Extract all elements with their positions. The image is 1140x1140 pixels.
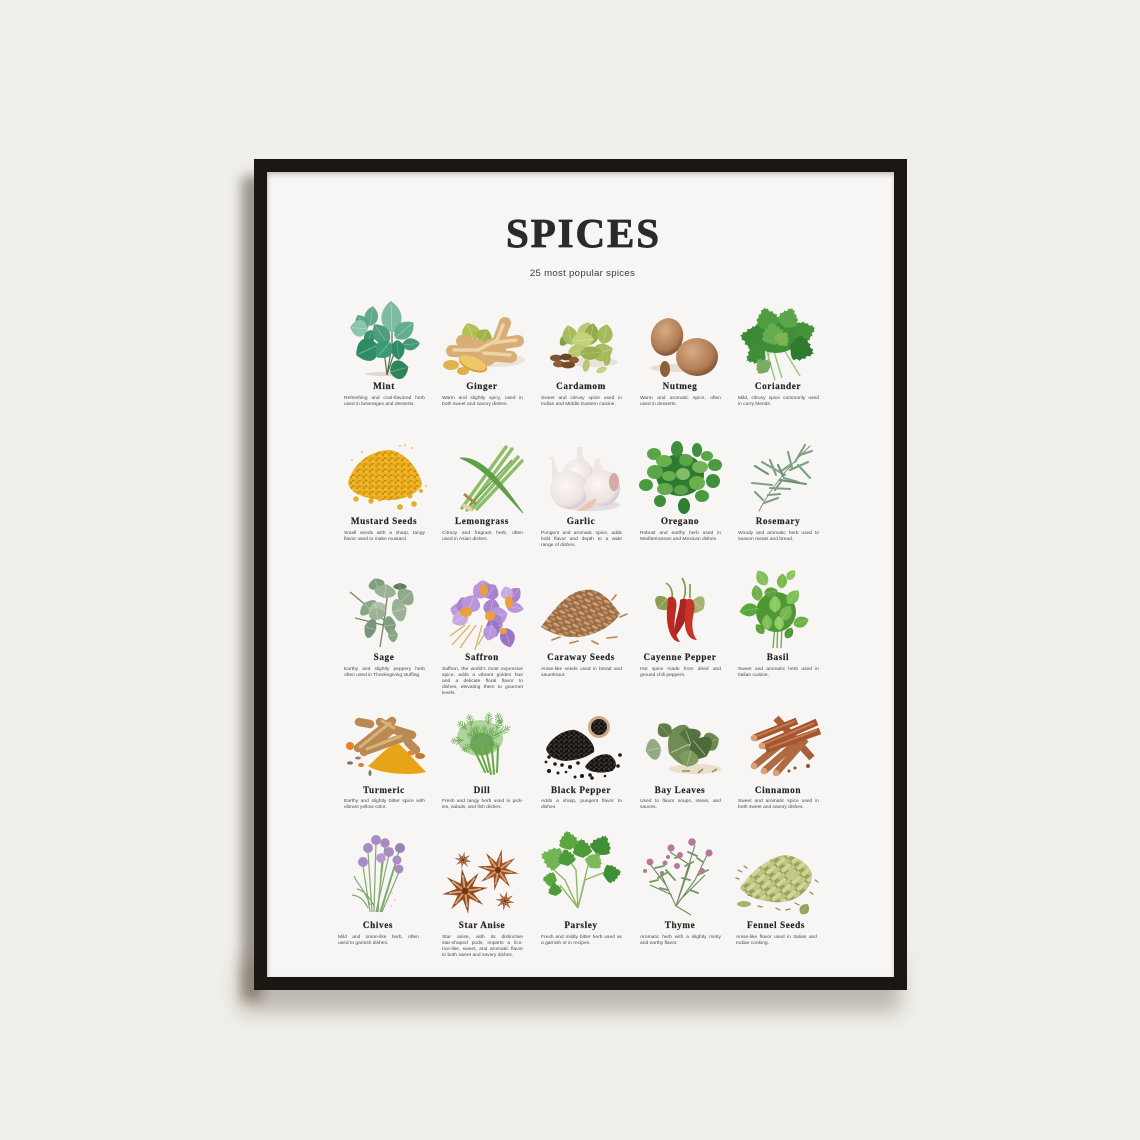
icon: oregano	[639, 441, 722, 514]
icon: star anise	[432, 826, 532, 914]
description: Robust and earthy herb used in	[640, 531, 721, 536]
description	[442, 666, 523, 696]
description: spice, adds a vibrant golden hue	[442, 673, 523, 678]
description: used in desserts.	[640, 402, 677, 407]
spice: Garlic	[541, 447, 622, 548]
description: Aromatic herb with a slightly minty	[640, 934, 721, 940]
description: Small seeds with a sharp, tangy	[344, 531, 425, 536]
description: Woody and aromatic herb used to	[738, 531, 819, 536]
description: Indian and Middle Eastern cuisine.	[541, 402, 616, 407]
spice: Parsley	[531, 826, 631, 961]
description: Warm and slightly spicy, used in	[442, 396, 523, 401]
wall shadow: left	[242, 176, 262, 1000]
icon: sage	[350, 578, 414, 648]
spice: Sage	[344, 578, 425, 678]
description	[640, 530, 721, 542]
description: both sweet and savory dishes.	[442, 402, 508, 407]
name: Parsley	[564, 920, 598, 930]
description: often used in Thanksgiving stuffing.	[344, 673, 420, 678]
name: Oregano	[661, 516, 699, 526]
description: vibrant yellow color.	[344, 804, 387, 810]
description	[640, 396, 721, 407]
name: Chives	[363, 920, 393, 930]
spice: Oregano	[639, 441, 722, 542]
description: season meats and bread.	[738, 537, 793, 542]
description: Star anise, with its distinctive	[442, 934, 523, 940]
description	[442, 798, 523, 810]
description	[640, 667, 721, 679]
name: Coriander	[755, 381, 801, 391]
spice: Chives	[328, 826, 428, 961]
description: Sweet and aromatic herb used in	[738, 667, 819, 672]
description: levels.	[442, 691, 456, 696]
name: Bay Leaves	[655, 784, 705, 794]
description: rice-like, sweet, and aromatic flavor	[442, 946, 523, 952]
icon: bay leaves	[630, 706, 730, 794]
name: Mustard Seeds	[351, 516, 417, 526]
description: Citrusy and fragrant herb, often	[442, 531, 523, 536]
description: Earthy and slightly bitter spice with	[344, 798, 425, 804]
name: Caraway Seeds	[547, 652, 615, 662]
spice: Cayenne Pepper	[640, 578, 721, 678]
name: Black Pepper	[551, 784, 611, 794]
description: Anise-like flavor used in Italian and	[736, 934, 817, 940]
description: Warm and aromatic spice, often	[640, 396, 721, 401]
description: Saffron, the world's most expensive	[442, 667, 523, 672]
description	[736, 934, 817, 946]
icon: chives	[328, 826, 428, 914]
icon: lemongrass	[460, 445, 524, 514]
icon: parsley	[531, 826, 631, 914]
description: used in beverages and desserts.	[344, 402, 415, 407]
spice: Mustard Seeds	[344, 444, 427, 542]
name: Fennel Seeds	[747, 920, 805, 930]
icon: turmeric	[334, 706, 434, 794]
description	[541, 530, 622, 548]
description	[738, 530, 819, 542]
description	[344, 530, 425, 542]
name: Garlic	[567, 516, 595, 526]
spice: Lemongrass	[442, 445, 524, 542]
description: flavor used to make mustard.	[344, 537, 407, 542]
name: Lemongrass	[455, 516, 509, 526]
description: ground chili peppers.	[640, 673, 685, 678]
description	[541, 396, 622, 407]
description: Refreshing and cool-flavored herb	[344, 396, 425, 401]
spice: Black Pepper	[531, 706, 631, 813]
spice: Rosemary	[738, 444, 819, 542]
description: to both sweet and savory dishes.	[442, 952, 513, 958]
name: Nutmeg	[663, 381, 697, 391]
description	[738, 798, 819, 810]
name: Cayenne Pepper	[644, 652, 716, 662]
description: Sweet and aromatic spice used in	[738, 798, 819, 804]
description: a garnish or in recipes.	[541, 940, 590, 946]
description: used in Asian dishes.	[442, 537, 488, 542]
spice: Saffron	[442, 580, 524, 696]
icon: garlic	[548, 447, 620, 511]
icon: caraway seeds	[541, 590, 628, 645]
frame	[254, 159, 907, 990]
icon: ginger	[443, 317, 525, 375]
description: and earthy flavor.	[640, 940, 678, 946]
description: Sweet and citrusy spice used in	[541, 396, 622, 401]
spice: Ginger	[442, 317, 525, 407]
name: Mint	[373, 381, 395, 391]
description: dishes.	[541, 804, 556, 810]
name: Star Anise	[459, 920, 505, 930]
description: Hot spice made from dried and	[640, 667, 721, 672]
spice: Mint	[344, 301, 425, 407]
icon: black pepper	[531, 706, 631, 794]
description: star-shaped pods, imparts a lico-	[442, 940, 523, 946]
name: Cardamom	[556, 381, 606, 391]
spice: Bay Leaves	[630, 706, 730, 813]
description: Mild, citrusy spice commonly used	[738, 396, 819, 401]
description: Italian cuisine.	[738, 673, 769, 678]
spice: Thyme	[630, 826, 730, 961]
description: Pungent and aromatic spice, adds	[541, 531, 622, 536]
icon: cardamom	[550, 322, 618, 374]
name: Saffron	[465, 652, 499, 662]
description: sauces.	[640, 804, 657, 810]
name: Dill	[474, 784, 490, 794]
description: Mild and onion-like herb, often	[338, 934, 419, 940]
description	[442, 396, 523, 407]
subtitle: 25 most popular spices	[530, 268, 635, 279]
icon: cayenne pepper	[630, 564, 730, 652]
spice: Star Anise	[432, 826, 532, 961]
icon: fennel seeds	[726, 826, 826, 914]
icon: mint	[350, 301, 420, 379]
icon: basil	[728, 564, 828, 652]
icon: cinnamon	[728, 706, 828, 794]
spice: Coriander	[738, 307, 819, 407]
icon: coriander	[740, 307, 816, 380]
name: Cinnamon	[755, 784, 801, 794]
description: Anise-like seeds used in bread and	[541, 667, 622, 672]
spice: Basil	[728, 564, 828, 699]
icon: rosemary	[751, 444, 813, 512]
name: Basil	[767, 652, 789, 662]
description: used to garnish dishes.	[338, 940, 388, 946]
spice: Cardamom	[541, 322, 622, 407]
description: Fresh and mildly bitter herb used as	[541, 934, 622, 940]
wall shadow: bottom	[240, 960, 900, 1012]
spice: Dill	[432, 706, 532, 813]
description: bold flavor and depth to a wide	[541, 537, 622, 542]
icon: nutmeg	[650, 318, 718, 377]
description: Fresh and tangy herb used in pick-	[442, 798, 523, 804]
description	[738, 667, 819, 679]
description	[541, 798, 622, 810]
description	[344, 798, 425, 810]
description: both sweet and savory dishes.	[738, 804, 804, 810]
name: Ginger	[466, 381, 498, 391]
spice: Caraway Seeds	[541, 590, 628, 678]
icon: dill	[432, 706, 532, 794]
spice: Turmeric	[334, 706, 434, 813]
name: Sage	[374, 652, 394, 662]
description: dishes, elevating them to gourmet	[442, 685, 523, 690]
description	[442, 934, 523, 958]
icon: mustard seeds	[348, 444, 427, 510]
icon: saffron	[450, 580, 524, 650]
description	[344, 396, 425, 407]
description: and a delicate floral flavor to	[442, 679, 523, 684]
description	[442, 530, 523, 542]
description	[640, 798, 721, 810]
description	[344, 666, 425, 678]
description	[541, 934, 622, 946]
spice: Fennel Seeds	[726, 826, 826, 961]
description: les, salads, and fish dishes.	[442, 804, 502, 810]
description: Indian cooking.	[736, 940, 769, 946]
description	[738, 396, 819, 407]
name: Turmeric	[363, 784, 405, 794]
name: Thyme	[665, 920, 695, 930]
description: in curry blends.	[738, 402, 771, 407]
icon: thyme	[630, 826, 730, 914]
description	[338, 934, 419, 946]
title: SPICES	[506, 210, 661, 256]
description: Used to flavor soups, stews, and	[640, 798, 721, 804]
description: Mediterranean and Mexican dishes.	[640, 537, 717, 542]
description: Earthy and slightly peppery herb	[344, 667, 425, 672]
description: range of dishes.	[541, 543, 576, 548]
name: Rosemary	[756, 516, 800, 526]
description: Adds a sharp, pungent flavor to	[541, 798, 622, 804]
description: sauerkraut.	[541, 673, 565, 678]
description	[640, 934, 721, 946]
spice: Cinnamon	[728, 706, 828, 813]
description	[541, 666, 622, 678]
paper	[267, 172, 894, 977]
spice: Nutmeg	[640, 318, 721, 407]
